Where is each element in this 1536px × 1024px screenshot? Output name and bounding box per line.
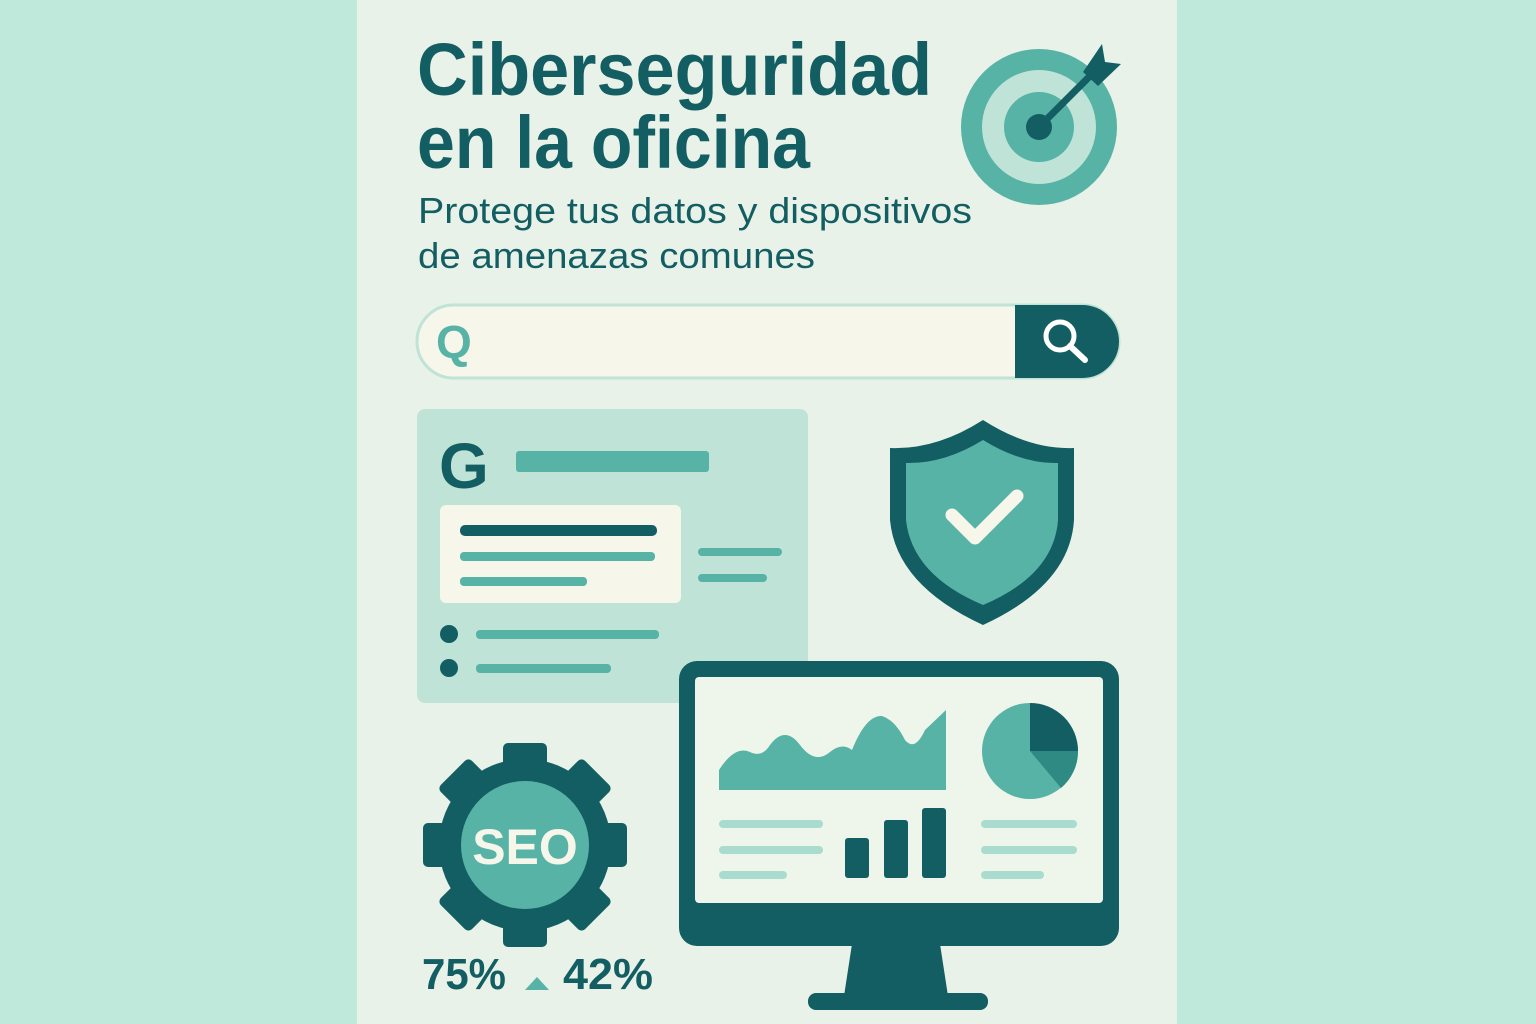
search bar: Q [436,316,472,368]
subtitle: Protege tus datos y dispositivos [418,190,972,231]
stats: 75% [422,950,506,999]
pie chart [982,703,1078,799]
title [417,28,932,184]
stats [422,950,653,999]
panel: search results card [417,409,808,703]
search bar [417,305,1119,378]
subtitle: de amenazas comunes [418,235,815,276]
bar chart [845,808,946,878]
panel: background [357,0,1177,1024]
subtitle [418,190,972,276]
icon: shield [890,420,1074,625]
icon: target [961,44,1121,205]
icon: SEO gear [423,743,627,947]
title: Ciberseguridad [417,28,932,111]
area chart [719,710,946,790]
icon: SEO gear: SEO [472,819,578,875]
title: en la oficina [417,101,811,184]
panel: search results card: G [439,430,489,502]
icon: monitor dashboard [679,661,1119,1010]
stats: 42% [563,950,653,999]
